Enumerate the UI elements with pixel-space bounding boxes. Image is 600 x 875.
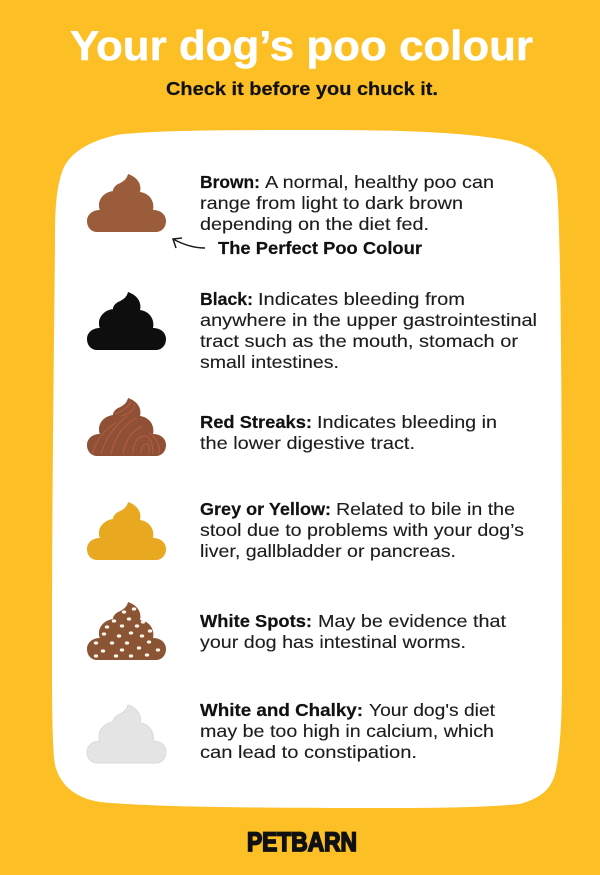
row: black [87,289,537,372]
text: red streaks description: the lower digestive tract. [200,433,415,453]
text: white spots description [200,611,506,652]
text: white and chalky description: can lead to constipation. [200,742,417,762]
text: grey or yellow description [200,499,524,561]
text: white spots description: May be evidence that [318,611,506,631]
text: white spots description: White Spots: [200,611,312,631]
text: grey or yellow description: Grey or Yellow: [200,499,331,519]
text: grey or yellow description: Related to bile in the [336,499,515,519]
icon: black poo [87,292,166,350]
title: Your dog’s poo colour [70,22,533,69]
text: brown description: depending on the diet fed. [200,214,429,234]
icon: yellow poo [87,502,166,560]
text: black description: small intestines. [200,352,339,372]
text: black description: Indicates bleeding from [258,289,465,309]
text: white and chalky description [200,700,495,762]
text: grey or yellow description: liver, gallbladder or pancreas. [200,541,456,561]
icon: red streaked poo [87,398,166,456]
text: white spots description: your dog has intestinal worms. [200,632,466,652]
text: brown description [200,172,494,234]
callout: perfect poo colour: The Perfect Poo Colour [218,238,422,258]
text: white and chalky description: Your dog's diet [369,700,495,720]
arrow to brown poo [173,238,205,248]
row: brown [87,172,494,258]
text: black description: Black: [200,289,253,309]
text: black description: anywhere in the upper gastrointestinal [200,310,537,330]
text: red streaks description: Red Streaks: [200,412,312,432]
panel: white card [52,130,562,808]
icon: chalky poo [87,705,166,763]
row: white spots [87,602,506,660]
icon: brown poo [87,174,166,232]
text: grey or yellow description: stool due to problems with your dog’s [200,520,524,540]
text: brown description: range from light to dark brown [200,193,463,213]
text: white and chalky description: may be too high in calcium, which [200,721,494,741]
text: brown description: Brown: [200,172,260,192]
row: grey or yellow [87,499,524,561]
text: white and chalky description: White and Chalky: [200,700,363,720]
icon: spotted poo [87,602,166,660]
text: red streaks description: Indicates bleeding in [317,412,497,432]
text: black description [200,289,537,372]
row: red streaks [87,398,497,456]
text: red streaks description [200,412,497,453]
subtitle: Check it before you chuck it. [166,78,438,99]
row: white and chalky [87,700,495,763]
logo: Petbarn: PETBARN [247,827,357,857]
text: black description: tract such as the mouth, stomach or [200,331,518,351]
text: brown description: A normal, healthy poo can [265,172,494,192]
